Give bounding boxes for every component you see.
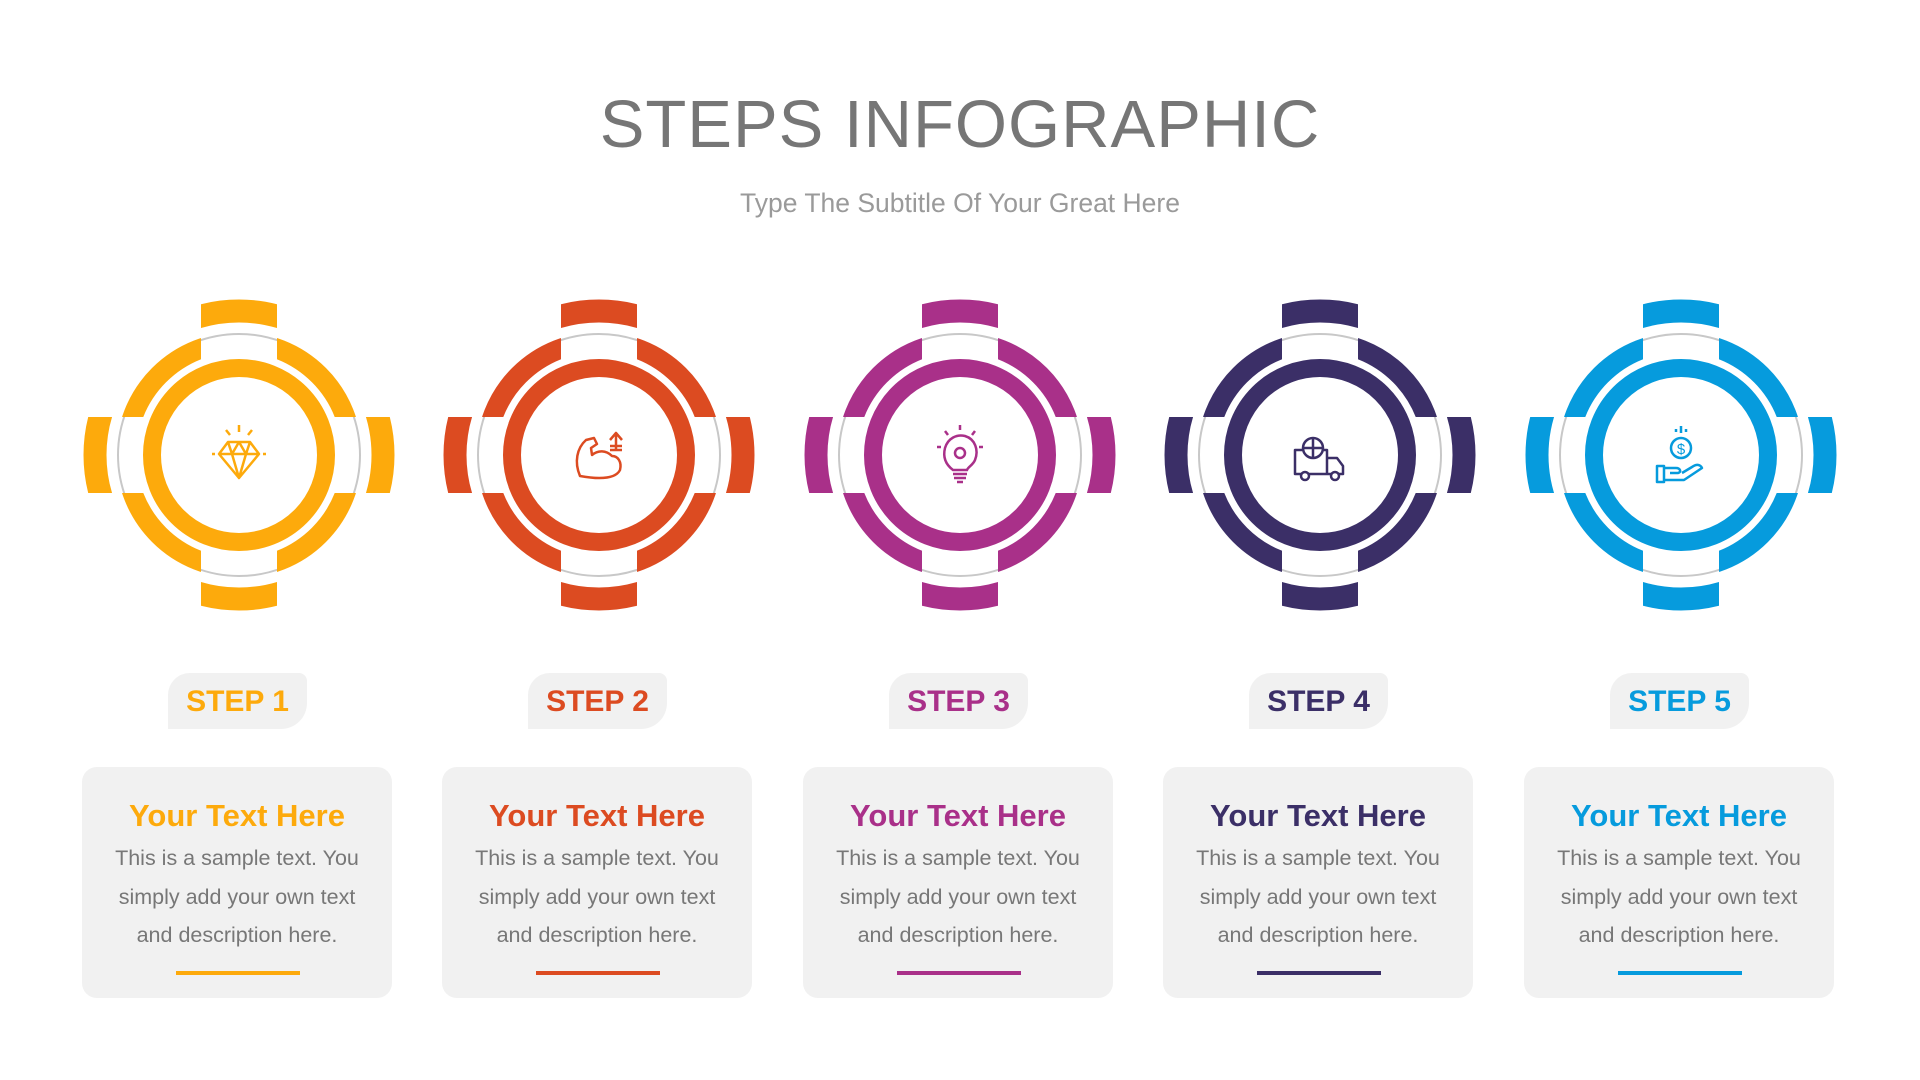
text card 1: and description here. <box>137 923 337 947</box>
text card 2: Your Text Here <box>489 798 705 833</box>
panel: step 2 <box>442 300 754 998</box>
text card 2: and description here. <box>497 923 697 947</box>
text card 2: This is a sample text. You <box>475 846 719 870</box>
text card 3: simply add your own text <box>840 884 1076 908</box>
step label 2: STEP 2 <box>546 685 649 718</box>
icon: delivery truck <box>1295 438 1343 480</box>
step label 2 <box>528 673 667 729</box>
icon: diamond <box>212 425 266 478</box>
step label 5 <box>1610 673 1749 729</box>
text card 1: This is a sample text. You <box>115 846 359 870</box>
step label 3: STEP 3 <box>907 685 1010 718</box>
text card 3: and description here. <box>858 923 1058 947</box>
text card 1 <box>82 767 392 998</box>
text card 1: simply add your own text <box>119 884 355 908</box>
ring graphic 2 <box>444 300 754 610</box>
step label 4 <box>1249 673 1388 729</box>
text card 2: simply add your own text <box>479 884 715 908</box>
text card 5: simply add your own text <box>1561 884 1797 908</box>
step label 1: STEP 1 <box>186 685 289 718</box>
text card 3: Your Text Here <box>850 798 1066 833</box>
ring graphic 3 <box>804 300 1116 610</box>
ring graphic 5 <box>1526 300 1836 610</box>
text card 5: Your Text Here <box>1571 798 1787 833</box>
icon: light bulb <box>937 425 983 482</box>
panel: step 1 <box>82 300 394 998</box>
step label 4: STEP 4 <box>1267 685 1370 718</box>
text card 5 <box>1524 767 1834 998</box>
step label 1 <box>168 673 307 729</box>
text card 4: This is a sample text. You <box>1196 846 1440 870</box>
step label 5: STEP 5 <box>1628 685 1731 718</box>
panel: step 3 <box>803 300 1116 998</box>
step label 3 <box>889 673 1028 729</box>
ring graphic 1 <box>84 300 394 610</box>
icon: hand with coin: $ <box>1677 441 1686 458</box>
text card 4: Your Text Here <box>1210 798 1426 833</box>
ring graphic 4 <box>1164 300 1476 610</box>
text card 3 <box>803 767 1113 998</box>
icon: hand with coin <box>1657 426 1702 482</box>
subtitle: Type The Subtitle Of Your Great Here <box>740 188 1180 218</box>
text card 1: Your Text Here <box>129 798 345 833</box>
text card 4: simply add your own text <box>1200 884 1436 908</box>
text card 2 <box>442 767 752 998</box>
title: STEPS INFOGRAPHIC <box>600 87 1320 162</box>
text card 5: This is a sample text. You <box>1557 846 1801 870</box>
text card 5: and description here. <box>1579 923 1779 947</box>
icon: muscle <box>577 433 622 478</box>
text card 4 <box>1163 767 1473 998</box>
text card 3: This is a sample text. You <box>836 846 1080 870</box>
panel: step 4 <box>1163 300 1476 998</box>
panel: step 5 <box>1524 300 1836 998</box>
text card 4: and description here. <box>1218 923 1418 947</box>
